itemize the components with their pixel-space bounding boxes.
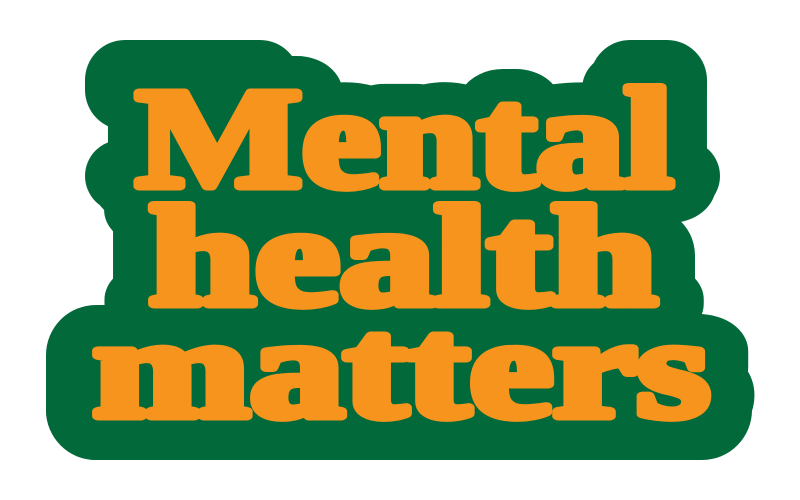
green sticker backing: matters <box>93 289 710 447</box>
title line: Mental: Mental <box>136 59 673 217</box>
green sticker backing: health <box>149 177 657 335</box>
title line: matters: matters <box>93 289 710 447</box>
orange title lettering <box>93 59 710 447</box>
green sticker backing <box>46 40 752 460</box>
green sticker backing: Mental <box>136 59 673 217</box>
title line: health: health <box>149 177 657 335</box>
